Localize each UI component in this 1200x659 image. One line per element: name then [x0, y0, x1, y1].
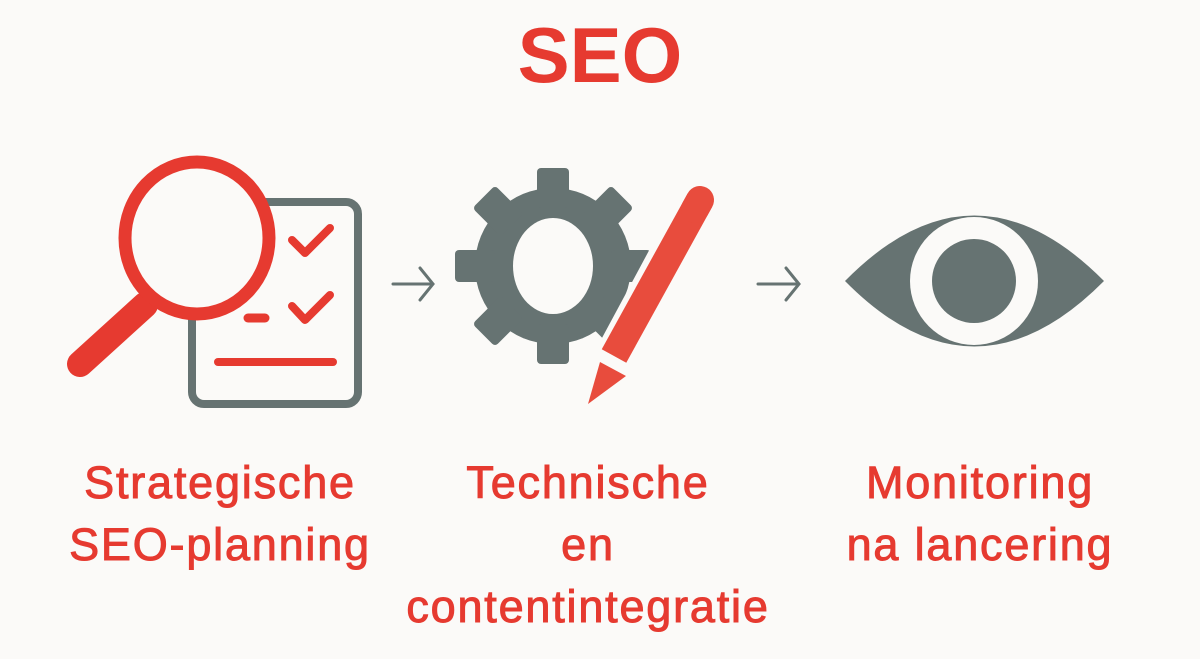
label: strategic planning: SEO-planning	[69, 519, 371, 570]
icon: magnifier	[80, 162, 269, 364]
icon: pencil	[588, 200, 700, 404]
label: monitoring	[847, 457, 1113, 570]
label: technical integration: Technische	[466, 457, 710, 508]
arrow 1	[393, 268, 433, 300]
icon: eye	[845, 216, 1104, 346]
label: monitoring: na lancering	[847, 519, 1113, 570]
label: technical integration	[406, 457, 770, 632]
icon: gear	[455, 168, 651, 364]
label: technical integration: contentintegratie	[406, 581, 770, 632]
title: SEO	[518, 11, 682, 99]
label: monitoring: Monitoring	[866, 457, 1094, 508]
label: strategic planning: Strategische	[84, 457, 356, 508]
label: technical integration: en	[561, 519, 615, 570]
arrow 2	[758, 268, 799, 300]
label: strategic planning	[69, 457, 371, 570]
icon: checklist document	[192, 202, 358, 404]
